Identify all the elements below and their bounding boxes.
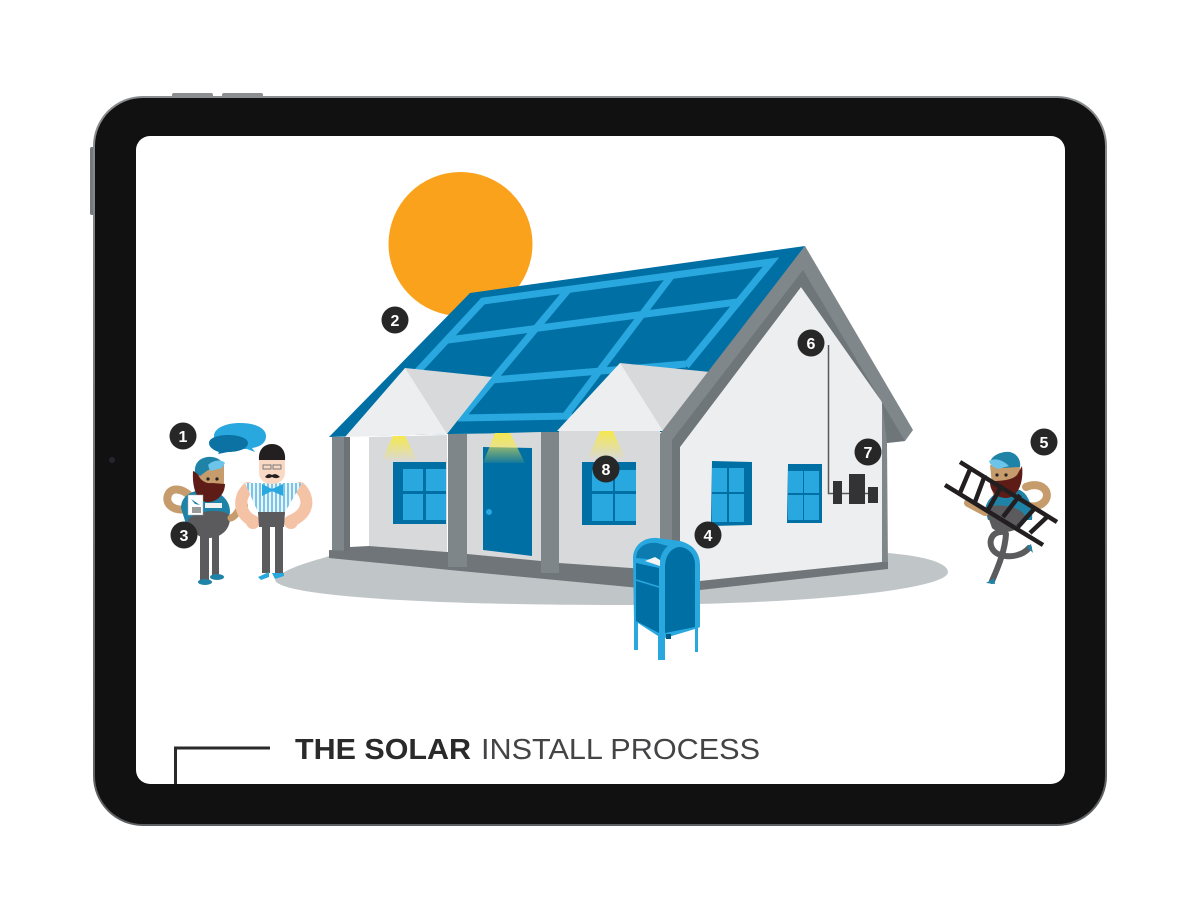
step marker 8: 8	[602, 462, 611, 479]
step marker 5: 5	[1040, 435, 1049, 452]
side windows	[711, 461, 822, 526]
step marker 7	[854, 438, 882, 466]
step marker 8	[592, 456, 620, 482]
step marker 6: 6	[807, 336, 816, 353]
step marker 3	[170, 522, 198, 548]
front windows and door	[393, 447, 636, 556]
step marker 2	[382, 306, 408, 334]
porch dormers	[345, 363, 710, 437]
step marker 4: 4	[704, 528, 713, 545]
porch columns and base	[329, 432, 888, 590]
step marker 3: 3	[180, 528, 189, 545]
step marker 6	[798, 330, 824, 356]
title: INSTALL PROCESS	[481, 734, 760, 766]
porch walls	[369, 431, 660, 570]
step marker 1	[170, 422, 196, 450]
step marker 1: 1	[179, 429, 188, 446]
installer with clipboard	[167, 457, 248, 585]
speech bubbles	[209, 423, 266, 454]
side gable wall	[660, 246, 913, 585]
ground shadow	[275, 552, 948, 605]
porch lights	[382, 431, 625, 463]
step marker 5	[1030, 428, 1058, 456]
step marker 7: 7	[864, 445, 873, 462]
tablet device frame	[90, 93, 1107, 826]
house illustration	[329, 246, 913, 590]
step marker 2: 2	[391, 313, 400, 330]
title	[176, 734, 760, 784]
installer with ladder	[945, 452, 1057, 584]
mailbox	[633, 538, 700, 660]
icon: sun	[388, 172, 532, 316]
client homeowner	[241, 444, 306, 580]
title: THE SOLAR	[295, 734, 471, 766]
electrical wire and equipment	[828, 345, 878, 504]
roof with solar panels	[329, 246, 805, 437]
client and installer characters	[167, 423, 1057, 585]
step marker 4	[694, 522, 722, 548]
